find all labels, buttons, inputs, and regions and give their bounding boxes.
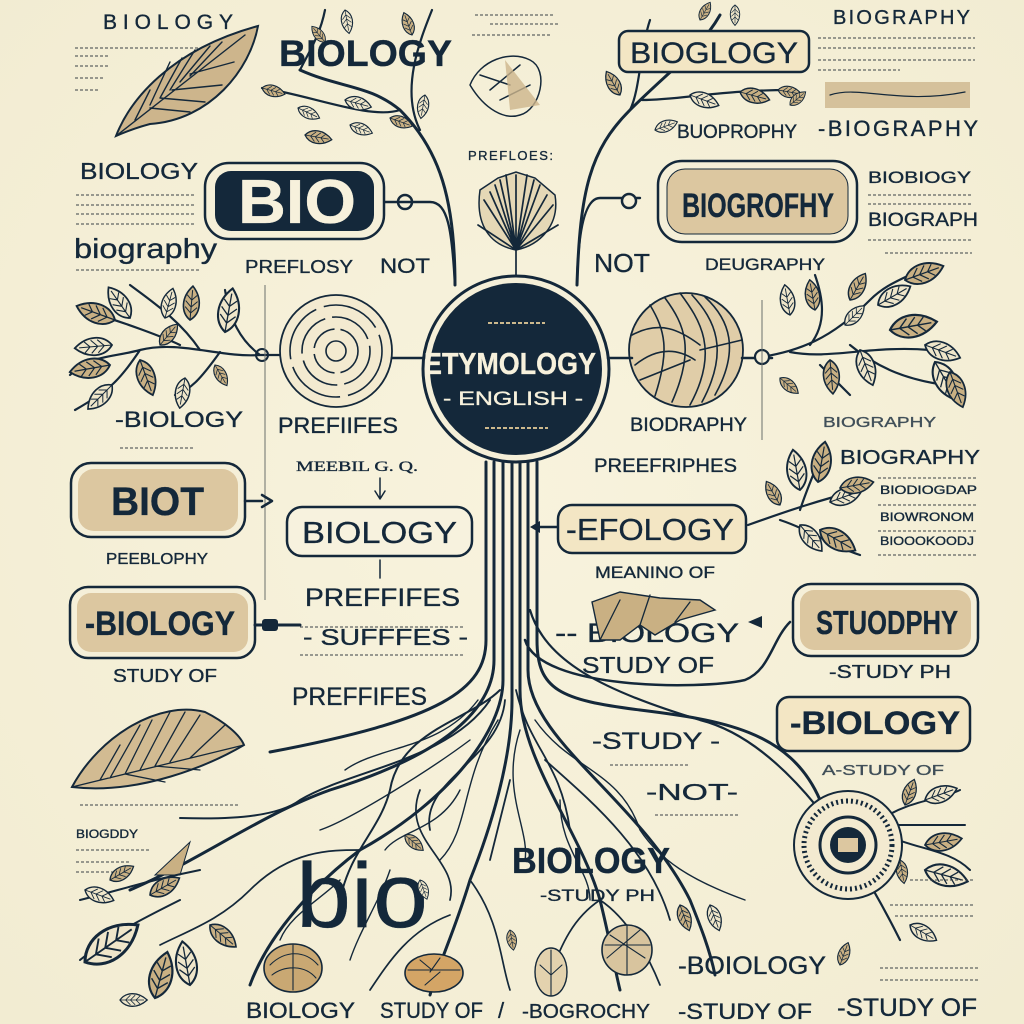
root seeds and pods [264, 831, 725, 996]
right labels stack: BIOGRAPHY [840, 447, 980, 469]
labels under pills: NOT [380, 255, 430, 278]
right labels beside pill: BIOGRAPH [868, 210, 978, 231]
right woven emblem [608, 293, 772, 407]
right label: preefriphes: PREEFRIPHES [594, 456, 737, 477]
top right labels: BIOGRAPHY [833, 7, 970, 29]
top center sketches: PREFLOES: [468, 148, 553, 163]
right labels stack: BIOOOKOODJ [880, 534, 974, 548]
bottom labels: -BOGROCHY [522, 1001, 650, 1023]
label: prefiifes left: PREFIIFES [278, 413, 398, 438]
label: not pill: BIOT [111, 480, 204, 524]
emblem: right seal with leaves [794, 777, 970, 899]
right labels beside pill [868, 168, 978, 253]
labels: study / not: -STUDY - [592, 728, 720, 755]
icon: lower-left leaf [72, 710, 244, 805]
bottom labels: / [498, 998, 505, 1023]
label: meaning of: MEANINO OF [595, 563, 715, 582]
left labels: biology / biography [74, 158, 217, 270]
left labels: biology / biography: BIOLOGY [80, 158, 198, 184]
pill: biogrofhy: BIOGROFHY [682, 187, 834, 225]
small heading [296, 459, 418, 499]
bottom labels: BIOLOGY [246, 998, 355, 1023]
pill: -biology left [70, 587, 300, 658]
labels: prefixes stack: - SUFFFES - [303, 624, 468, 650]
large label: bio: bio [296, 845, 428, 947]
pill: BIO: BIO [238, 168, 356, 237]
heading: biology: BIOLOGY [279, 33, 452, 74]
right labels stack: BIOWRONOM [880, 510, 974, 524]
sketch label: biology with animals: -- BIOLOGY [555, 618, 739, 648]
label: buoprophy: BUOPROPHY [677, 122, 797, 143]
label box: bioglogy [619, 31, 809, 72]
central tree trunk and roots [130, 462, 900, 995]
label: biology study ph: BIOLOGY [512, 840, 670, 881]
central circle [423, 276, 609, 462]
bottom labels [246, 994, 977, 1024]
top center sketches [468, 15, 560, 163]
label: study of center right: STUDY OF [582, 652, 714, 678]
top left label [75, 11, 235, 90]
sketch label: biology with animals [555, 592, 739, 648]
small label block left: BIOGDDY [76, 827, 138, 841]
icon: top fan leaf [478, 172, 558, 275]
label: study ph: -STUDY PH [829, 662, 951, 682]
subtitle: english: - ENGLISH - [443, 389, 583, 410]
root leaves left [76, 861, 241, 1006]
label: biology study ph: -STUDY PH [540, 886, 655, 905]
right labels stack [840, 447, 980, 555]
pill: studphy: STUODPHY [816, 604, 958, 641]
right labels stack: BIODIOGDAP [880, 483, 977, 497]
labels: study / not [592, 728, 740, 815]
lower right labels [678, 880, 980, 980]
labels under pills: PREFLOSY [245, 257, 353, 277]
left branch with leaves [68, 282, 282, 415]
pill: biogrofhy [622, 161, 857, 242]
box: -efology: -EFOLOGY [566, 512, 734, 547]
labels: prefixes stack: PREFFIFES [292, 683, 427, 711]
box: biology center left: BIOLOGY [302, 515, 457, 550]
upper tree branches [262, 10, 790, 285]
bottom labels: STUDY OF [380, 998, 483, 1023]
left labels: biology / biography: biography [74, 233, 217, 264]
labels under right pill: NOT [594, 248, 650, 278]
right labels beside pill: BIOBIOGY [868, 168, 971, 187]
bottom labels: -STUDY OF [678, 999, 812, 1024]
label: not pill [71, 463, 272, 537]
label: -biology left: -BIOLOGY [115, 407, 243, 432]
bottom labels: -STUDY OF [837, 994, 977, 1022]
left spiral emblem [280, 295, 424, 407]
icon: feather [116, 26, 258, 136]
label: -biology left [115, 407, 243, 448]
small heading: MEEBIL G. Q. [296, 459, 418, 475]
label: study small: A-STUDY OF [822, 762, 944, 779]
top right labels: -BIOGRAPHY [818, 116, 978, 141]
labels: prefixes stack: PREFFIFES [305, 584, 460, 612]
box: -efology [530, 505, 746, 553]
label box: bioglogy: BIOGLOGY [630, 37, 798, 70]
pill: BIO [205, 163, 412, 239]
labels: prefixes stack [292, 584, 468, 711]
label: biography center right: BIODRAPHY [630, 415, 747, 436]
box: biology center left [287, 507, 472, 578]
box: -biology right: -BIOLOGY [790, 705, 960, 741]
lower right labels: -BOIOLOGY [678, 952, 826, 980]
label: study of left: STUDY OF [113, 666, 217, 686]
box: -biology right [777, 697, 970, 751]
title: etymology: ETYMOLOGY [424, 346, 596, 381]
labels under right pill: DEUGRAPHY [705, 255, 825, 274]
small label block left [76, 827, 190, 875]
label: biology study ph [512, 840, 670, 905]
top left label: BIOLOGY [103, 11, 233, 34]
right leaf sprig [748, 440, 875, 559]
labels under pills [245, 255, 430, 278]
label: peeblophy: PEEBLOPHY [106, 551, 208, 568]
vertical separators [265, 285, 762, 600]
pill: -biology left: -BIOLOGY [85, 605, 235, 643]
top center leaf sprigs [261, 0, 809, 146]
right branch with leaves [755, 257, 971, 410]
top right labels [818, 7, 978, 141]
pill: studphy [748, 584, 978, 656]
label: biograpy right: BIOGRAPHY [823, 414, 936, 431]
labels: study / not: -NOT- [646, 779, 738, 805]
labels under right pill [594, 248, 825, 278]
